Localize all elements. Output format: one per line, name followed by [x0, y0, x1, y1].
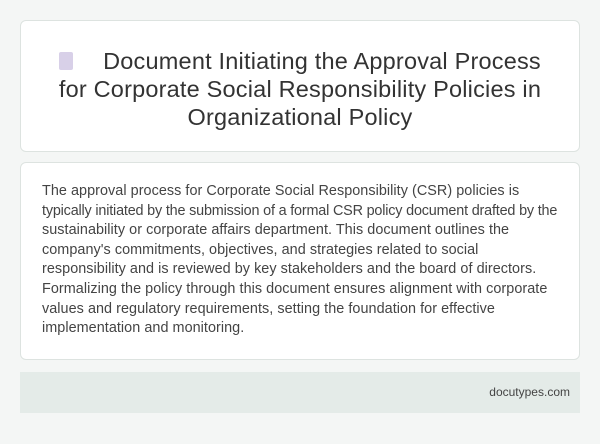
text block: implementation and monitoring. [42, 320, 244, 336]
icon: document [59, 52, 73, 70]
footer text: docutypes.com [489, 385, 570, 399]
title: Organizational Policy [188, 104, 412, 130]
footer [20, 372, 580, 413]
panel: description [20, 162, 580, 360]
text block: typically initiated by the submission of a formal CSR policy document drafted by the [42, 203, 557, 219]
text block: sustainability or corporate affairs department. This document outlines the [42, 222, 509, 238]
text block: values and regulatory requirements, setting the foundation for effective [42, 301, 495, 317]
text block: The approval process for Corporate Social Responsibility (CSR) policies is [42, 183, 519, 199]
panel: title card [20, 20, 580, 152]
text block: responsibility and is reviewed by key stakeholders and the board of directors. [42, 261, 536, 277]
text block [42, 183, 557, 336]
text block: company's commitments, objectives, and strategies related to social [42, 242, 478, 258]
title: for Corporate Social Responsibility Policies in [59, 76, 541, 102]
text block: Formalizing the policy through this document ensures alignment with corporate [42, 281, 547, 297]
title: Document Initiating the Approval Process [103, 48, 541, 74]
title [59, 48, 541, 130]
